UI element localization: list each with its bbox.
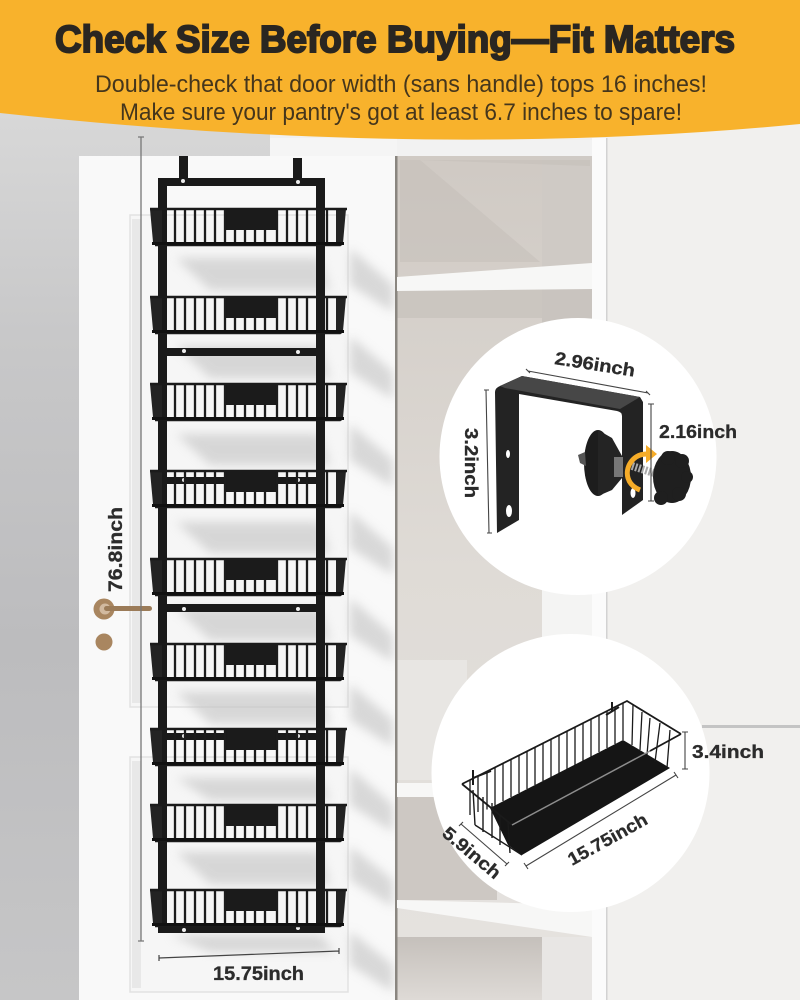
subtitle: Make sure your pantry's got at least 6.7 inches to spare! bbox=[120, 99, 682, 126]
label 3.2inch: 3.2inch bbox=[461, 428, 481, 498]
dimension marks bbox=[484, 369, 654, 533]
label 2.16inch: 2.16inch bbox=[659, 422, 737, 442]
rack baskets bbox=[150, 209, 347, 926]
circle callout: hook bracket bbox=[440, 318, 737, 595]
wall bbox=[0, 110, 270, 1000]
shelves bbox=[397, 263, 592, 291]
bracket bbox=[495, 376, 643, 533]
circle callout: wire basket bbox=[432, 634, 764, 912]
screw bbox=[632, 466, 654, 473]
width dimension line bbox=[159, 948, 339, 961]
subtitle: Double-check that door width (sans handle) tops 16 inches! bbox=[95, 71, 707, 98]
door handle bbox=[94, 598, 152, 650]
pantry interior bbox=[397, 140, 592, 1000]
label 15.75inch: 15.75inch bbox=[564, 809, 651, 869]
label 3.4inch: 3.4inch bbox=[692, 742, 764, 762]
frame bbox=[592, 138, 607, 1000]
suction cup bbox=[578, 430, 623, 496]
rotation arrow bbox=[627, 445, 657, 490]
yellow header banner bbox=[0, 0, 800, 140]
subtitle bbox=[95, 71, 707, 126]
dimension marks bbox=[459, 732, 688, 869]
basket bbox=[462, 701, 681, 856]
door panels bbox=[130, 215, 348, 992]
rack frame bbox=[158, 156, 325, 933]
label 5.9inch: 5.9inch bbox=[438, 823, 505, 883]
label 2.96inch: 2.96inch bbox=[553, 348, 637, 381]
height label: 76.8inch bbox=[106, 507, 127, 592]
width label: 15.75inch bbox=[213, 964, 304, 985]
door bbox=[79, 156, 397, 1000]
knob bbox=[653, 451, 693, 505]
height dimension line bbox=[138, 137, 144, 941]
rack shadows bbox=[170, 248, 393, 992]
title: Check Size Before Buying—Fit Matters bbox=[55, 19, 735, 61]
